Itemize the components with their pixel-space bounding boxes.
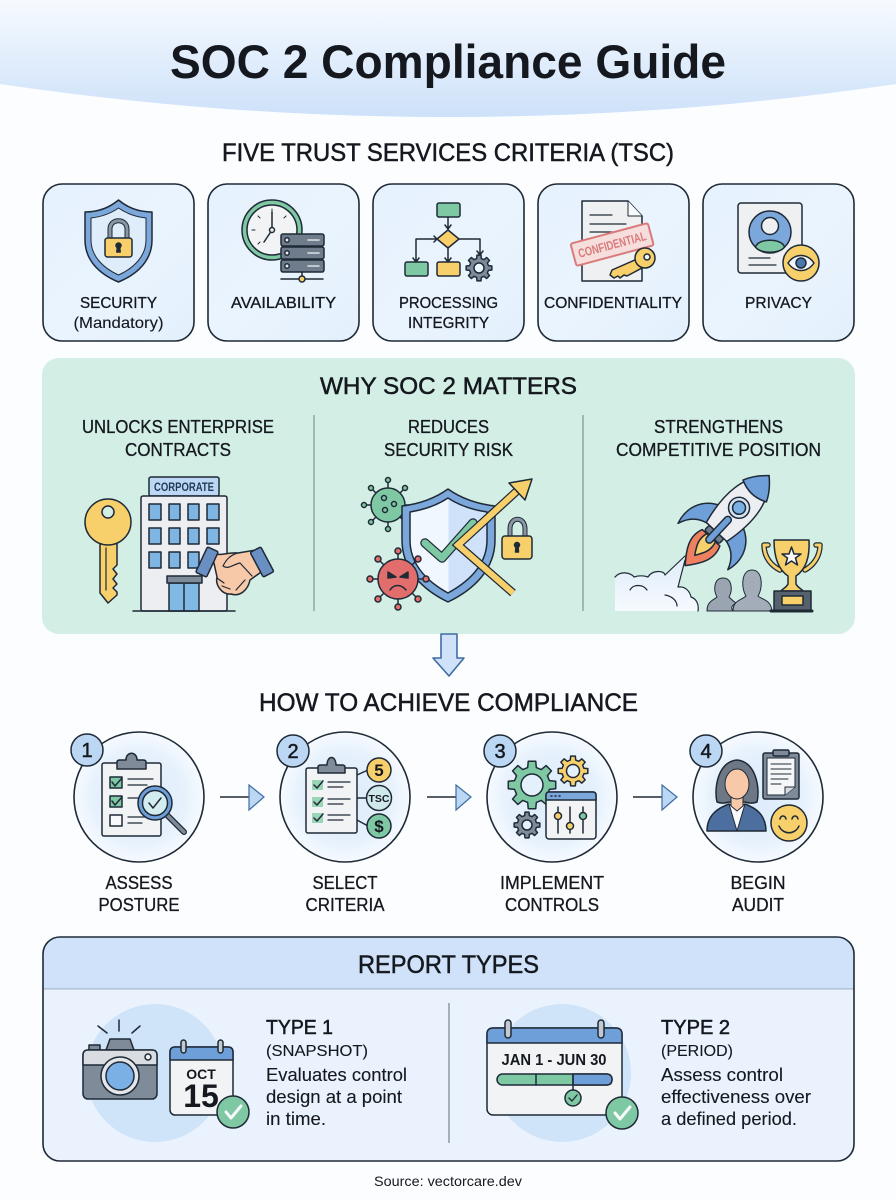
label: mandatory: (Mandatory) xyxy=(74,315,164,332)
arrow: down xyxy=(433,634,464,676)
icon: red virus xyxy=(367,548,429,610)
icon: clock and server xyxy=(242,200,324,282)
label: confidentiality: CONFIDENTIALITY xyxy=(544,295,682,312)
column text: unlocks enterprise contracts xyxy=(82,417,274,460)
label: begin audit xyxy=(730,873,786,915)
panel: confidentiality xyxy=(538,184,689,341)
label: implement controls xyxy=(500,873,604,915)
date: OCT 15: 15 xyxy=(183,1078,219,1114)
icon: key, corporate building and handshake xyxy=(85,477,274,611)
heading: report types: REPORT TYPES xyxy=(358,951,539,979)
icon: shield, viruses, arrow and lock xyxy=(362,478,532,610)
date: OCT 15: OCT xyxy=(186,1066,216,1082)
badge: 4: 4 xyxy=(700,741,712,763)
badge: 1: 1 xyxy=(81,740,93,762)
badge text: TSC: TSC xyxy=(368,793,390,805)
section heading: five trust services criteria: FIVE TRUST SERVICES CRITERIA (TSC) xyxy=(222,139,674,167)
label: integrity: INTEGRITY xyxy=(408,315,489,332)
icon: trophy xyxy=(764,540,820,611)
panel: report types xyxy=(43,937,854,1161)
badge: 2: 2 xyxy=(287,741,299,763)
source: Source: vectorcare.dev xyxy=(374,1173,522,1189)
arrow: step 1 to 2 xyxy=(220,785,264,810)
text: type 2 period: effectiveness over xyxy=(661,1087,811,1107)
column text: unlocks enterprise contracts: CONTRACTS xyxy=(125,440,231,460)
label: assess posture xyxy=(98,873,180,915)
badge: 3: 3 xyxy=(494,741,506,763)
badge: 2 xyxy=(277,735,309,767)
icon: checklist with magnifier xyxy=(102,753,184,836)
badge: check xyxy=(606,1097,638,1129)
text: type 2 period xyxy=(661,1017,811,1129)
section heading: how to achieve compliance: HOW TO ACHIEVE COMPLIANCE xyxy=(259,689,638,717)
text: type 1 snapshot xyxy=(266,1017,407,1129)
label: begin audit: AUDIT xyxy=(732,895,784,915)
text: type 2 period: Assess control xyxy=(661,1065,783,1085)
icon: team silhouettes xyxy=(707,570,772,611)
column text: unlocks enterprise contracts: UNLOCKS ENTERPRISE xyxy=(82,417,274,437)
type 1 illustration: camera and calendar xyxy=(83,1004,249,1142)
arrow: step 3 to 4 xyxy=(633,785,677,810)
icon: gears and control panel xyxy=(508,756,596,839)
column text: strengthens competitive position xyxy=(616,417,821,460)
panel: availability xyxy=(208,184,359,341)
icon: auditor, report and smiley xyxy=(707,750,807,841)
icon: green virus xyxy=(362,478,412,532)
text: type 1 snapshot: (SNAPSHOT) xyxy=(266,1043,368,1060)
date range: JAN 1 - JUN 30 xyxy=(502,1052,607,1069)
label: implement controls: CONTROLS xyxy=(505,895,599,915)
step 1: assess posture xyxy=(71,732,204,915)
badge text: 5: 5 xyxy=(374,761,384,780)
type 2 illustration: period calendar xyxy=(487,1004,638,1142)
text: type 1 snapshot: in time. xyxy=(266,1109,326,1129)
step 3: implement controls xyxy=(484,732,617,915)
panel: processing integrity xyxy=(373,184,524,341)
icon: checklist with criteria badges xyxy=(306,758,392,838)
column text: strengthens competitive position: STRENGTHENS xyxy=(654,417,783,437)
badge: check xyxy=(217,1096,249,1128)
icon: profile document with eye xyxy=(738,203,819,281)
panel: why SOC 2 matters xyxy=(42,358,855,634)
column text: reduces security risk: SECURITY RISK xyxy=(384,440,513,460)
arrow: step 2 to 3 xyxy=(427,785,471,810)
icon: key, corporate building and handshake: CORPORATE xyxy=(154,480,214,494)
label: assess posture: ASSESS xyxy=(106,873,172,893)
text: type 1 snapshot: design at a point xyxy=(266,1087,402,1107)
column text: reduces security risk xyxy=(384,417,513,460)
header band xyxy=(0,0,896,117)
panel: security xyxy=(43,184,194,341)
label: implement controls: IMPLEMENT xyxy=(500,873,604,893)
label: select criteria: CRITERIA xyxy=(306,895,384,915)
heading: why SOC 2 matters: WHY SOC 2 MATTERS xyxy=(320,373,577,400)
icon: document, stamp and key xyxy=(571,201,655,281)
title: SOC 2 Compliance Guide xyxy=(170,35,726,88)
text: type 1 snapshot: TYPE 1 xyxy=(266,1017,333,1039)
label: privacy: PRIVACY xyxy=(745,295,812,312)
badge: 1 xyxy=(71,734,103,766)
column text: strengthens competitive position: COMPETITIVE POSITION xyxy=(616,440,821,460)
label: processing: PROCESSING xyxy=(399,295,498,312)
label: select criteria: SELECT xyxy=(312,873,378,893)
badge: 3 xyxy=(484,735,516,767)
icon: rocket launch, team and trophy xyxy=(615,451,820,611)
panel: privacy xyxy=(703,184,854,341)
column text: reduces security risk: REDUCES xyxy=(408,417,489,437)
badge text: dollar: $ xyxy=(374,817,384,836)
label: availability: AVAILABILITY xyxy=(231,295,336,312)
label: assess posture: POSTURE xyxy=(98,895,180,915)
label: security: SECURITY xyxy=(80,295,157,312)
icon: shield with lock xyxy=(85,200,152,282)
icon: document, stamp and key: CONFIDENTIAL xyxy=(577,229,648,261)
label: begin audit: BEGIN xyxy=(730,873,786,893)
step 4: begin audit xyxy=(690,732,823,915)
step 2: select criteria xyxy=(277,732,410,915)
text: type 2 period: (PERIOD) xyxy=(661,1043,733,1060)
text: type 1 snapshot: Evaluates control xyxy=(266,1065,407,1085)
icon: flowchart with gear xyxy=(405,203,492,281)
text: type 2 period: a defined period. xyxy=(661,1109,797,1129)
text: type 2 period: TYPE 2 xyxy=(661,1017,730,1039)
badge: 4 xyxy=(690,735,722,767)
label: select criteria xyxy=(306,873,384,915)
